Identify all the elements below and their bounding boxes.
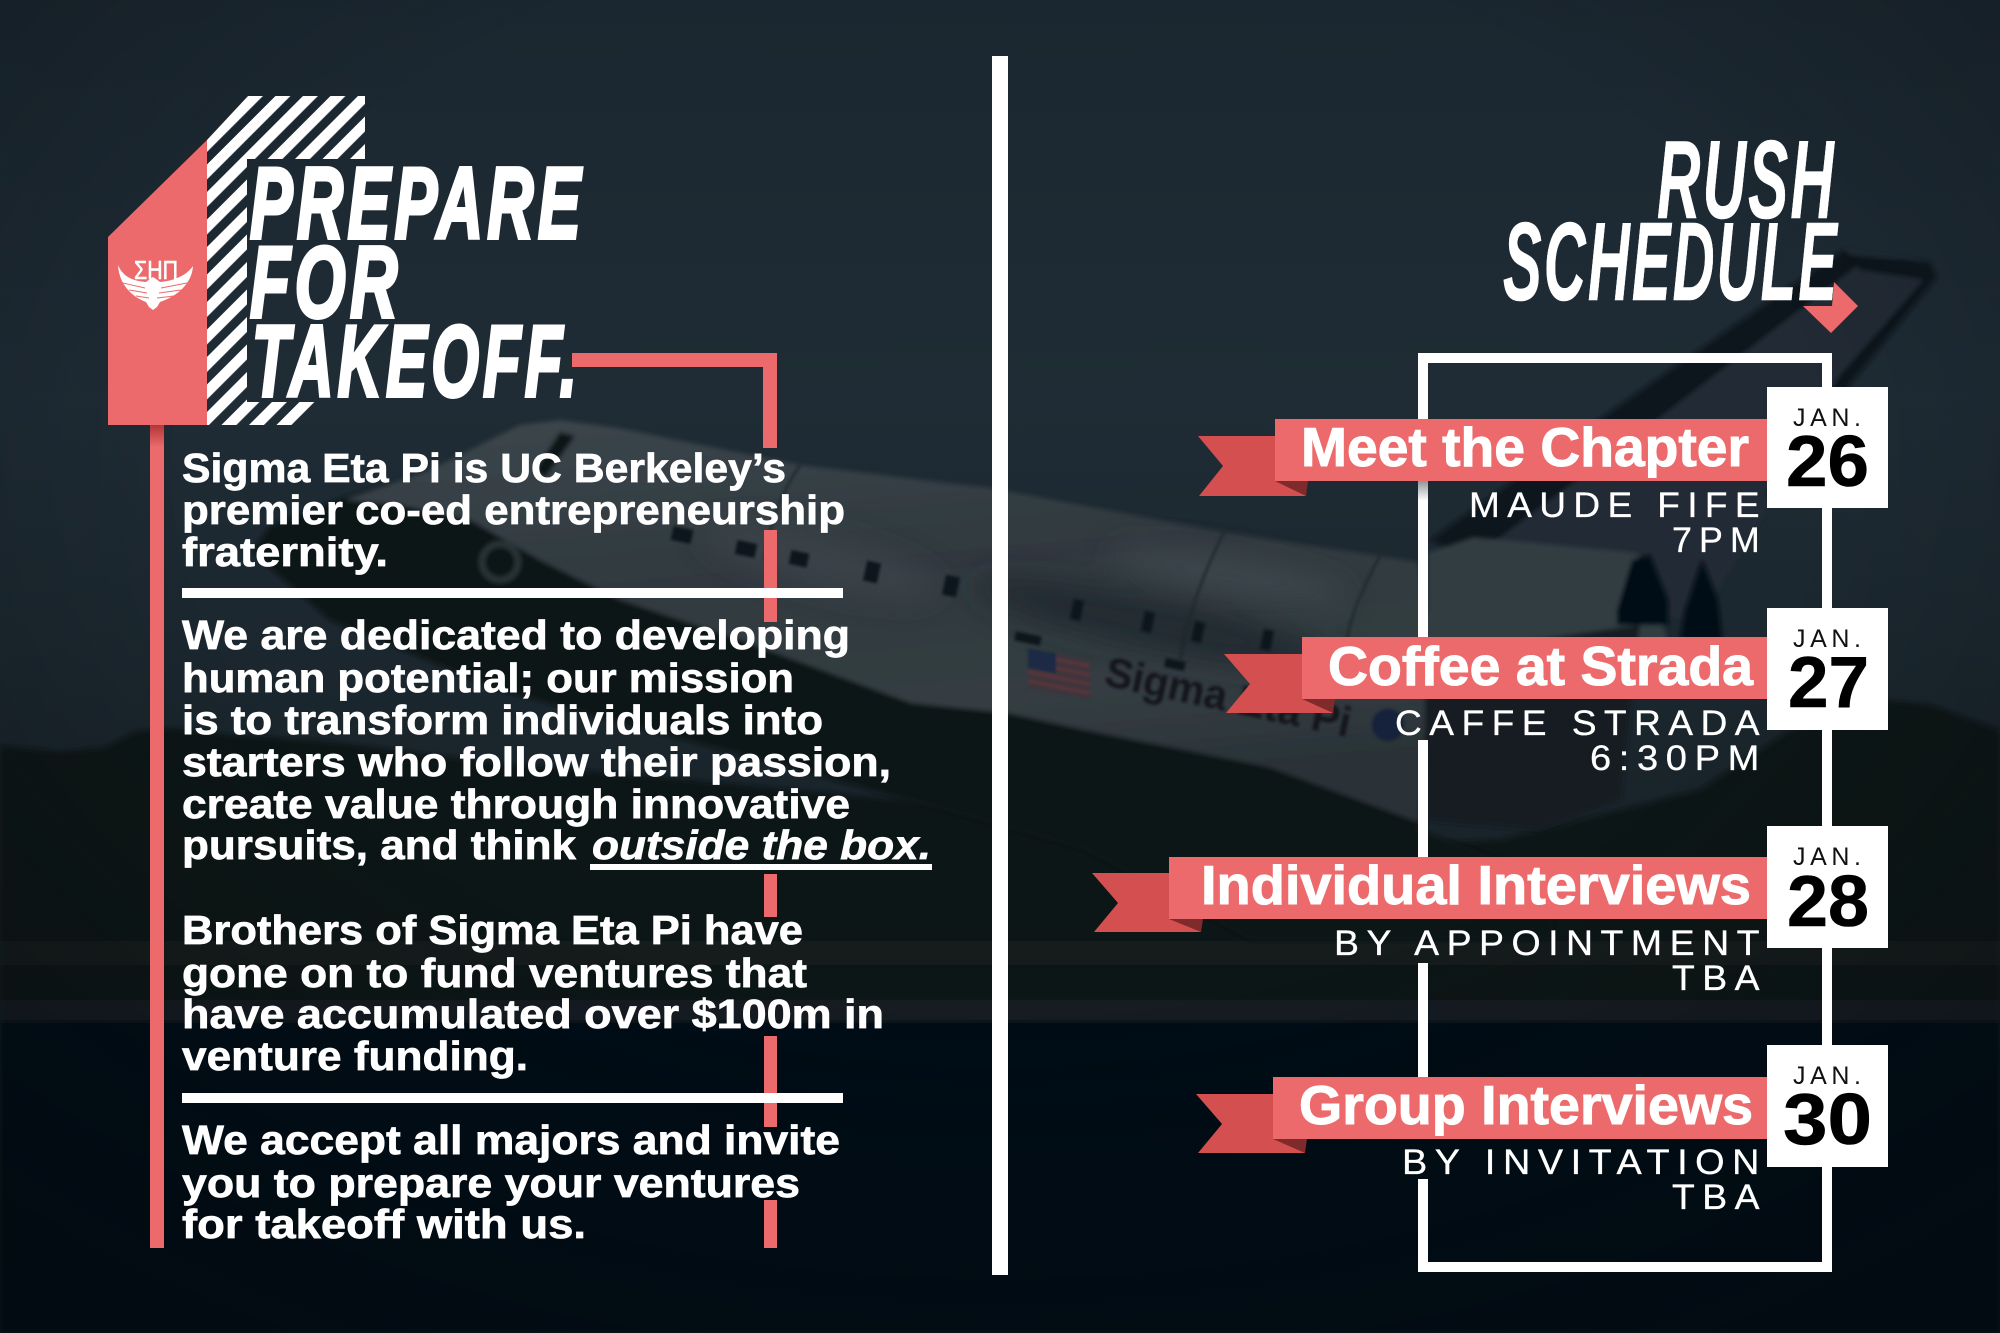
ribbon [1198, 416, 1767, 496]
text block: mission: starters who follow their passion, [182, 739, 891, 785]
date badge: 26 [1786, 422, 1869, 502]
shuttle tail fin [1430, 250, 1937, 620]
date badge: 30 [1783, 1080, 1872, 1160]
ribbon: Coffee at Strada [1328, 635, 1753, 697]
location and time: TBA [1672, 959, 1767, 998]
text block: mission: outside the box. [592, 822, 931, 868]
heading [1503, 118, 1839, 324]
shuttle body [252, 420, 1722, 940]
text block: mission: pursuits, and think [182, 822, 576, 868]
location and time: CAFFE STRADA [1395, 704, 1767, 743]
date badge: 27 [1788, 643, 1869, 723]
date badge: 28 [1787, 862, 1869, 942]
text block: brothers: venture funding. [182, 1033, 528, 1079]
ribbon: Meet the Chapter [1301, 416, 1749, 478]
ground and tree line [0, 700, 2000, 1333]
text block: intro [182, 445, 845, 575]
text block: brothers: Brothers of Sigma Eta Pi have [182, 907, 803, 953]
schedule frame [1418, 353, 1832, 1272]
text block: mission: human potential; our mission [182, 655, 794, 701]
title [250, 148, 585, 418]
panel: about the fraternity [108, 96, 932, 1248]
text block: mission: create value through innovative [182, 781, 850, 827]
date badge: JAN. [1793, 625, 1861, 653]
text block: brothers: have accumulated over $100m in [182, 991, 884, 1037]
agency badge [1372, 709, 1404, 741]
event: coffee at strada [1224, 608, 1888, 778]
ribbon [1092, 854, 1767, 932]
event: meet the chapter [1198, 387, 1888, 560]
date badge: JAN. [1793, 1062, 1861, 1090]
text block: brothers [182, 907, 884, 1079]
location and time [1469, 486, 1767, 560]
date badge [1767, 1045, 1888, 1167]
location and time [1334, 924, 1767, 998]
location and time [1395, 704, 1767, 778]
date badge: JAN. [1793, 843, 1861, 871]
event: individual interviews [1092, 826, 1888, 998]
hatches [671, 526, 1274, 671]
red connector line from title [572, 353, 777, 1248]
logo banner [108, 140, 207, 425]
location and time: 6:30PM [1590, 739, 1767, 778]
shuttle markings [671, 465, 1404, 746]
text block: intro: premier co-ed entrepreneurship [182, 487, 845, 533]
ribbon: Group Interviews [1299, 1074, 1753, 1136]
striped block [207, 96, 365, 425]
logo letters: ΣΗΠ [134, 255, 178, 285]
event: group interviews [1196, 1045, 1888, 1217]
location and time: TBA [1672, 1178, 1767, 1217]
ribbon: Individual Interviews [1201, 854, 1751, 916]
ribbon [1224, 635, 1767, 713]
date badge [1767, 608, 1888, 730]
arrow [1803, 282, 1858, 333]
text block: mission: We are dedicated to developing [182, 612, 850, 658]
date badge: JAN. [1793, 404, 1861, 432]
title: PREPARE [250, 148, 585, 260]
text block: mission [182, 612, 932, 870]
location and time: BY APPOINTMENT [1334, 924, 1767, 963]
text block: invitation: you to prepare your ventures [182, 1160, 800, 1206]
location and time: BY INVITATION [1402, 1143, 1767, 1182]
fuselage shading [698, 508, 1351, 690]
text block: invitation: for takeoff with us. [182, 1201, 586, 1247]
text block: mission: is to transform individuals into [182, 697, 823, 743]
red vertical rule [150, 425, 164, 1248]
heading: RUSH [1657, 118, 1836, 242]
text block: brothers: gone on to fund ventures that [182, 950, 807, 996]
text block: invitation [182, 1117, 840, 1247]
text block: intro: Sigma Eta Pi is UC Berkeley’s [182, 445, 786, 491]
ribbon [1196, 1074, 1767, 1153]
center divider [992, 56, 1008, 1275]
location and time: MAUDE FIFE [1469, 486, 1767, 525]
title: TAKEOFF. [252, 306, 581, 418]
flag [1028, 648, 1090, 700]
title: FOR [250, 227, 402, 339]
panel seams [765, 465, 1380, 660]
location and time: 7PM [1672, 521, 1767, 560]
location and time [1402, 1143, 1767, 1217]
name on fuselage: Sigma Eta Pi [1101, 648, 1355, 746]
date badge [1767, 826, 1888, 948]
text block: invitation: We accept all majors and invite [182, 1117, 840, 1163]
date badge [1767, 387, 1888, 508]
text block: intro: fraternity. [182, 529, 388, 575]
panel: rush schedule [1092, 118, 1888, 1272]
icon: eagle [118, 265, 193, 310]
